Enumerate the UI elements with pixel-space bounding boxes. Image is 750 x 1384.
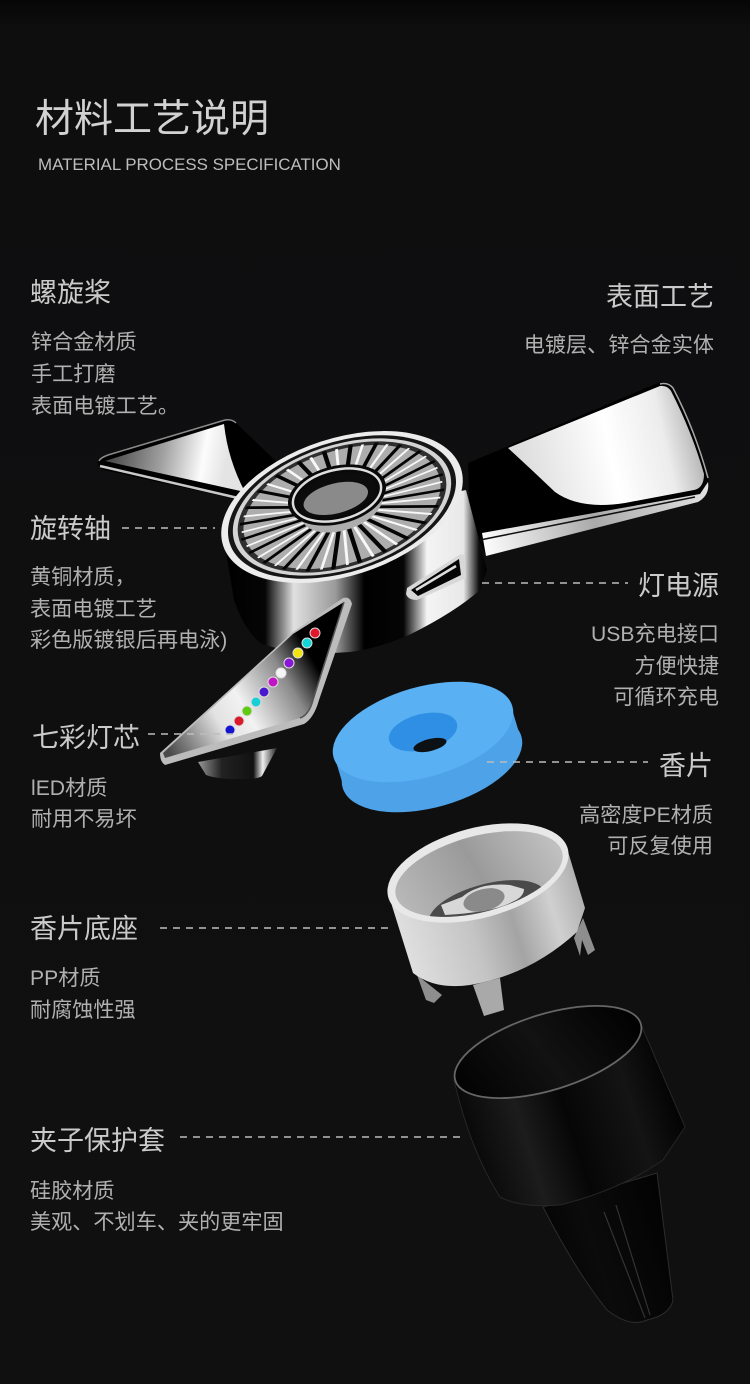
text block: LED core: lED材质	[31, 776, 107, 800]
usb port	[406, 554, 466, 600]
text block: propeller	[30, 278, 179, 418]
text block: rotating shaft	[30, 514, 227, 652]
text block: fragrance tablet: 可反复使用	[607, 834, 713, 858]
text block: tablet base	[30, 914, 138, 1022]
text block: propeller: 手工打磨	[31, 362, 116, 386]
text block: clip cover	[30, 1126, 284, 1234]
text block: fragrance tablet: 高密度PE材质	[579, 803, 713, 827]
text block: light power: USB充电接口	[591, 622, 719, 646]
text block: clip cover: 美观、不划车、夹的更牢固	[30, 1210, 284, 1234]
holder opening	[444, 987, 652, 1117]
text block: light power: 灯电源	[638, 571, 719, 601]
text block: clip cover: 硅胶材质	[30, 1179, 115, 1203]
icon: white tablet base	[387, 823, 595, 1016]
hub centre eye	[281, 455, 393, 535]
text block: tablet base: PP材质	[30, 966, 100, 990]
text block: fragrance tablet	[579, 751, 713, 858]
text block: propeller: 螺旋桨	[30, 278, 111, 308]
connector lines	[122, 528, 648, 1137]
hub cylinder	[224, 490, 487, 655]
text block: tablet base: 香片底座	[30, 914, 138, 944]
text block: light power	[591, 571, 719, 709]
hub face	[202, 403, 482, 611]
right blade	[468, 382, 708, 556]
led dots	[225, 628, 320, 735]
text block: LED core: 七彩灯芯	[32, 723, 140, 753]
text block: LED core: 耐用不易坏	[31, 807, 137, 831]
spokes	[223, 419, 461, 595]
holder body	[454, 1027, 685, 1206]
icon: black vent clip	[444, 987, 685, 1322]
text block: propeller: 表面电镀工艺。	[31, 394, 179, 418]
clip legs	[543, 1173, 673, 1322]
text block: light power: 方便快捷	[634, 654, 719, 678]
text block: propeller: 锌合金材质	[31, 330, 137, 354]
led plate	[160, 598, 352, 765]
text block: rotating shaft: 表面电镀工艺	[30, 597, 157, 621]
left blade	[98, 420, 280, 500]
icon: propeller assembly	[98, 382, 708, 655]
icon: blue fragrance tablet	[321, 663, 534, 831]
text block: fragrance tablet: 香片	[659, 751, 713, 781]
text block: LED core	[31, 723, 140, 831]
title: 材料工艺说明	[35, 98, 269, 141]
text block: surface process: 表面工艺	[606, 282, 714, 312]
text block: light power: 可循环充电	[613, 685, 719, 709]
text block: clip cover: 夹子保护套	[30, 1126, 165, 1156]
text block: rotating shaft: 旋转轴	[30, 514, 111, 544]
text block: rotating shaft: 彩色版镀银后再电泳)	[30, 628, 227, 652]
text block: surface process: 电镀层、锌合金实体	[524, 333, 714, 357]
text block: surface process	[524, 282, 714, 357]
base tabs	[473, 978, 504, 1016]
icon: LED light strip	[160, 598, 352, 779]
led foot	[198, 748, 277, 779]
base body	[388, 845, 585, 986]
base floor	[430, 880, 542, 917]
text block: tablet base: 耐腐蚀性强	[30, 998, 136, 1022]
text block: rotating shaft: 黄铜材质，	[30, 565, 136, 589]
subtitle: MATERIAL PROCESS SPECIFICATION	[38, 155, 341, 174]
